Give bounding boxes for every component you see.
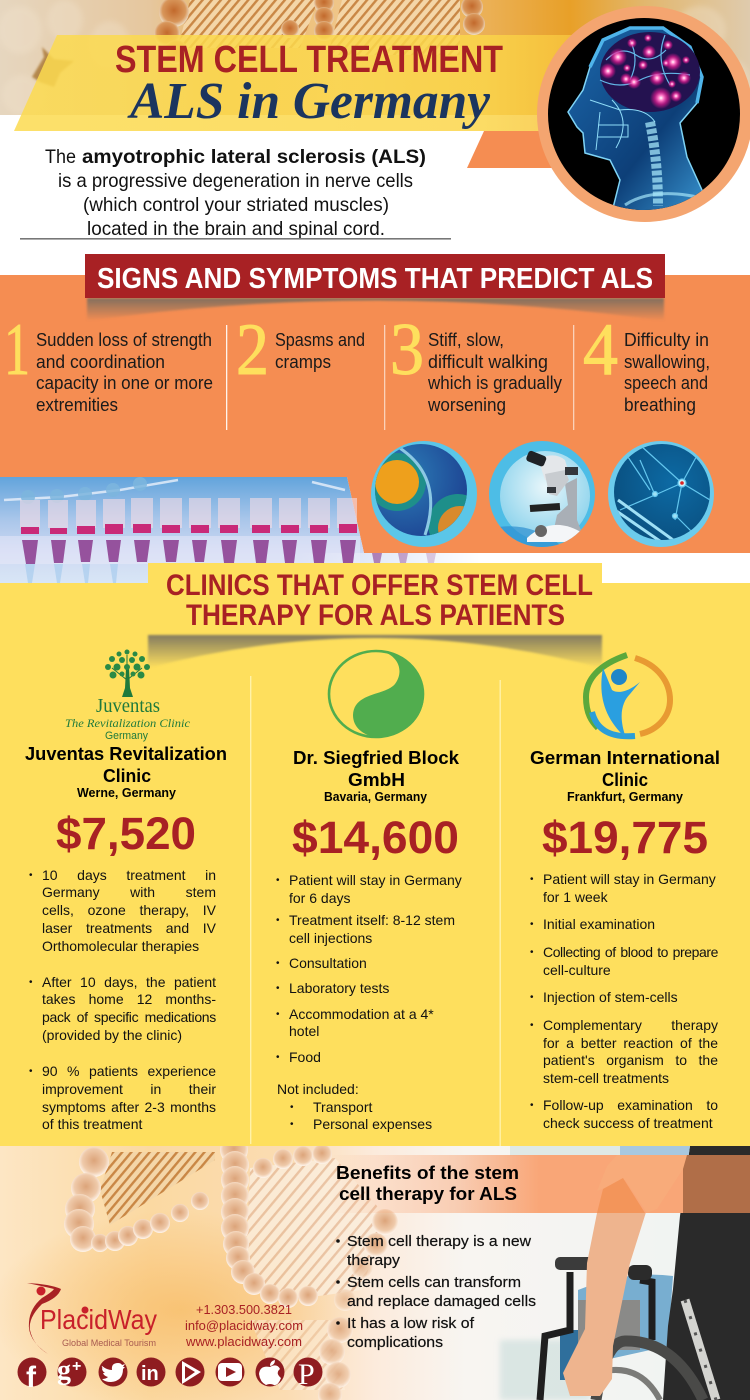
benefits list: Stem cells can transform	[347, 1275, 521, 1291]
symptom 1: Sudden loss of strength	[36, 329, 212, 350]
benefits heading band: cell therapy for ALS	[339, 1183, 517, 1204]
clinic name: German International	[530, 747, 720, 768]
intro text: is a progressive degeneration in nerve cells	[58, 170, 413, 192]
symptom 1: 1	[4, 309, 30, 391]
treatment details: takes home 12 months-	[42, 991, 216, 1007]
price: $7,520	[56, 808, 196, 859]
treatment details: •	[290, 1102, 294, 1113]
yellow clinics background	[0, 563, 750, 1146]
benefits photo background	[0, 1146, 680, 1400]
symptom 3: worsening	[427, 394, 506, 415]
treatment details: Personal expenses	[313, 1116, 432, 1132]
icon: facebook: f	[26, 1361, 37, 1394]
treatment details: (provided by the clinic)	[42, 1027, 182, 1043]
benefits list: therapy	[347, 1253, 401, 1269]
icon: pinterest: P	[298, 1358, 315, 1391]
treatment details	[276, 872, 462, 1132]
image circle: neurons	[608, 441, 714, 548]
icon: google plus: g	[57, 1355, 71, 1386]
treatment details	[530, 871, 718, 1131]
benefits list: It has a low risk of	[347, 1316, 475, 1332]
clinic name	[293, 747, 460, 804]
symptom 3: Stiff, slow,	[428, 329, 504, 350]
icon: linkedin	[136, 1358, 166, 1386]
icon: linkedin: in	[141, 1363, 159, 1385]
contact details: info@placidway.com	[185, 1318, 303, 1333]
treatment details: •	[290, 1119, 294, 1130]
icon: apple	[256, 1358, 284, 1386]
symptom 4: Difficulty in	[624, 329, 709, 350]
symptom 3	[390, 309, 563, 415]
icon: twitter	[98, 1358, 128, 1386]
symptom 3: 3	[390, 309, 424, 391]
clinics heading: THERAPY FOR ALS PATIENTS	[186, 599, 565, 632]
contact details	[185, 1302, 303, 1349]
top background: DNA and cells	[0, 0, 750, 115]
clinic name	[530, 747, 720, 804]
treatment details: cell-culture	[543, 962, 611, 978]
treatment details: Patient will stay in Germany	[543, 871, 716, 887]
logo: yin-yang	[329, 650, 424, 738]
contact details: www.placidway.com	[185, 1334, 302, 1349]
symptom 4: breathing	[624, 394, 696, 415]
clinic name: Juventas Revitalization	[25, 743, 227, 764]
title line 1: STEM CELL TREATMENT	[115, 39, 503, 81]
PlacidWay logo: Global Medical Tourism	[62, 1338, 156, 1349]
treatment details: improvement in their	[42, 1081, 216, 1097]
test tubes photo	[0, 477, 480, 583]
treatment details: Not included:	[277, 1081, 359, 1097]
treatment details: laser treatments and IV	[42, 920, 216, 936]
treatment details: Treatment itself: 8-12 stem	[289, 912, 455, 928]
treatment details: stem-cell treatments	[543, 1070, 669, 1086]
treatment details: cell injections	[289, 930, 372, 946]
icon: pinterest	[294, 1358, 322, 1391]
icon: youtube	[216, 1358, 244, 1386]
symptom 4	[583, 309, 710, 415]
logo: Juventas	[65, 650, 191, 742]
treatment details: Initial examination	[543, 916, 655, 932]
clinic name: Bavaria, Germany	[324, 790, 427, 804]
intro text: The	[45, 146, 76, 168]
treatment details: Consultation	[289, 955, 367, 971]
price: $19,775	[542, 812, 708, 863]
benefits list	[336, 1234, 536, 1351]
treatment details: for 1 week	[543, 889, 608, 905]
logo: Juventas: Germany	[105, 730, 148, 742]
price: $14,600	[292, 812, 459, 863]
panel: Dr. Siegfried Block	[276, 650, 462, 1132]
PlacidWay logo: PlacidWay	[40, 1304, 157, 1335]
clinic name: GmbH	[348, 769, 405, 790]
orange wedge under title	[467, 131, 580, 168]
benefits list: Stem cell therapy is a new	[347, 1234, 532, 1250]
title line 2: ALS in Germany	[127, 73, 491, 130]
treatment details: symptoms after 2-3 months	[42, 1099, 216, 1115]
symptom 1	[4, 309, 213, 415]
benefits list: and replace damaged cells	[347, 1294, 536, 1310]
treatment details: Follow-up examination to	[543, 1097, 718, 1113]
symptom 3: which is gradually	[427, 372, 563, 393]
symptom 4: swallowing,	[624, 351, 710, 372]
treatment details: Germany with stem	[42, 884, 216, 900]
PlacidWay logo	[27, 1283, 157, 1354]
treatment details: Transport	[313, 1099, 372, 1115]
symptoms heading: SIGNS AND SYMPTOMS THAT PREDICT ALS	[97, 263, 653, 295]
treatment details: of this treatment	[42, 1116, 142, 1132]
social icons	[18, 1355, 322, 1394]
symptom 2	[236, 309, 365, 391]
benefits heading band: Benefits of the stem	[336, 1162, 519, 1183]
panel: Juventas clinic	[25, 650, 227, 1132]
clinic name: Dr. Siegfried Block	[293, 747, 460, 768]
symptom 2: cramps	[275, 351, 331, 372]
treatment details: 90 % patients experience	[42, 1063, 216, 1079]
treatment details: for 6 days	[289, 890, 350, 906]
icon: play store	[176, 1358, 204, 1386]
clinics heading	[148, 569, 602, 668]
symptom 4: speech and	[624, 372, 708, 393]
clinics heading: CLINICS THAT OFFER STEM CELL	[166, 569, 593, 602]
symptom 4: 4	[583, 309, 618, 391]
benefits list: complications	[347, 1335, 443, 1351]
treatment details: patient's organism to the	[543, 1052, 718, 1068]
treatment details: Accommodation at a 4*	[289, 1006, 434, 1022]
panel: German International Clinic	[530, 652, 720, 1131]
icon: facebook	[18, 1358, 46, 1394]
intro text	[20, 146, 451, 240]
treatment details: Patient will stay in Germany	[289, 872, 462, 888]
image circle: microscope	[489, 441, 595, 558]
clinic name: Frankfurt, Germany	[567, 790, 683, 804]
clinic name: Clinic	[103, 765, 151, 786]
intro text: located in the brain and spinal cord.	[87, 218, 385, 240]
wheelchair user photo	[540, 1146, 750, 1400]
treatment details: Orthomolecular therapies	[42, 938, 199, 954]
symptom 2: Spasms and	[275, 329, 365, 350]
image circle: stem cells	[371, 441, 477, 547]
symptom 1: capacity in one or more	[36, 372, 213, 393]
title banner	[14, 35, 585, 131]
treatment details: Injection of stem-cells	[543, 989, 678, 1005]
treatment details: After 10 days, the patient	[42, 974, 216, 990]
treatment details: cells, ozone therapy, IV	[42, 902, 216, 918]
brain image circle	[537, 6, 750, 222]
logo: German International	[586, 655, 670, 738]
treatment details: hotel	[289, 1023, 319, 1039]
treatment details	[29, 867, 216, 1132]
treatment details: pack of specific medications	[42, 1009, 216, 1025]
treatment details: 10 days treatment in	[42, 867, 216, 883]
symptom 1: extremities	[36, 394, 118, 415]
contact details: +1.303.500.3821	[196, 1302, 292, 1317]
treatment details: check success of treatment	[543, 1115, 713, 1131]
symptom 2: 2	[236, 309, 269, 391]
intro text: amyotrophic lateral sclerosis (ALS)	[82, 146, 426, 168]
treatment details: Laboratory tests	[289, 980, 389, 996]
logo: Juventas: The Revitalization Clinic	[65, 716, 191, 730]
symptom 1: and coordination	[36, 351, 165, 372]
intro text: (which control your striated muscles)	[83, 194, 389, 216]
treatment details: Food	[289, 1049, 321, 1065]
icon: google plus	[57, 1355, 86, 1386]
clinic name: Werne, Germany	[77, 786, 176, 800]
clinic name: Clinic	[602, 769, 648, 790]
treatment details: for a better reaction of the	[543, 1035, 718, 1051]
treatment details: Complementary therapy	[543, 1017, 718, 1033]
clinic name	[25, 743, 227, 800]
icon: google plus: +	[72, 1358, 81, 1375]
orange symptoms panel background	[0, 275, 750, 553]
benefits heading band	[330, 1155, 750, 1213]
symptoms heading	[85, 254, 665, 321]
treatment details: Collecting of blood to prepare	[543, 944, 718, 960]
symptom 3: difficult walking	[428, 351, 548, 372]
logo: Juventas: Juventas	[96, 695, 160, 717]
